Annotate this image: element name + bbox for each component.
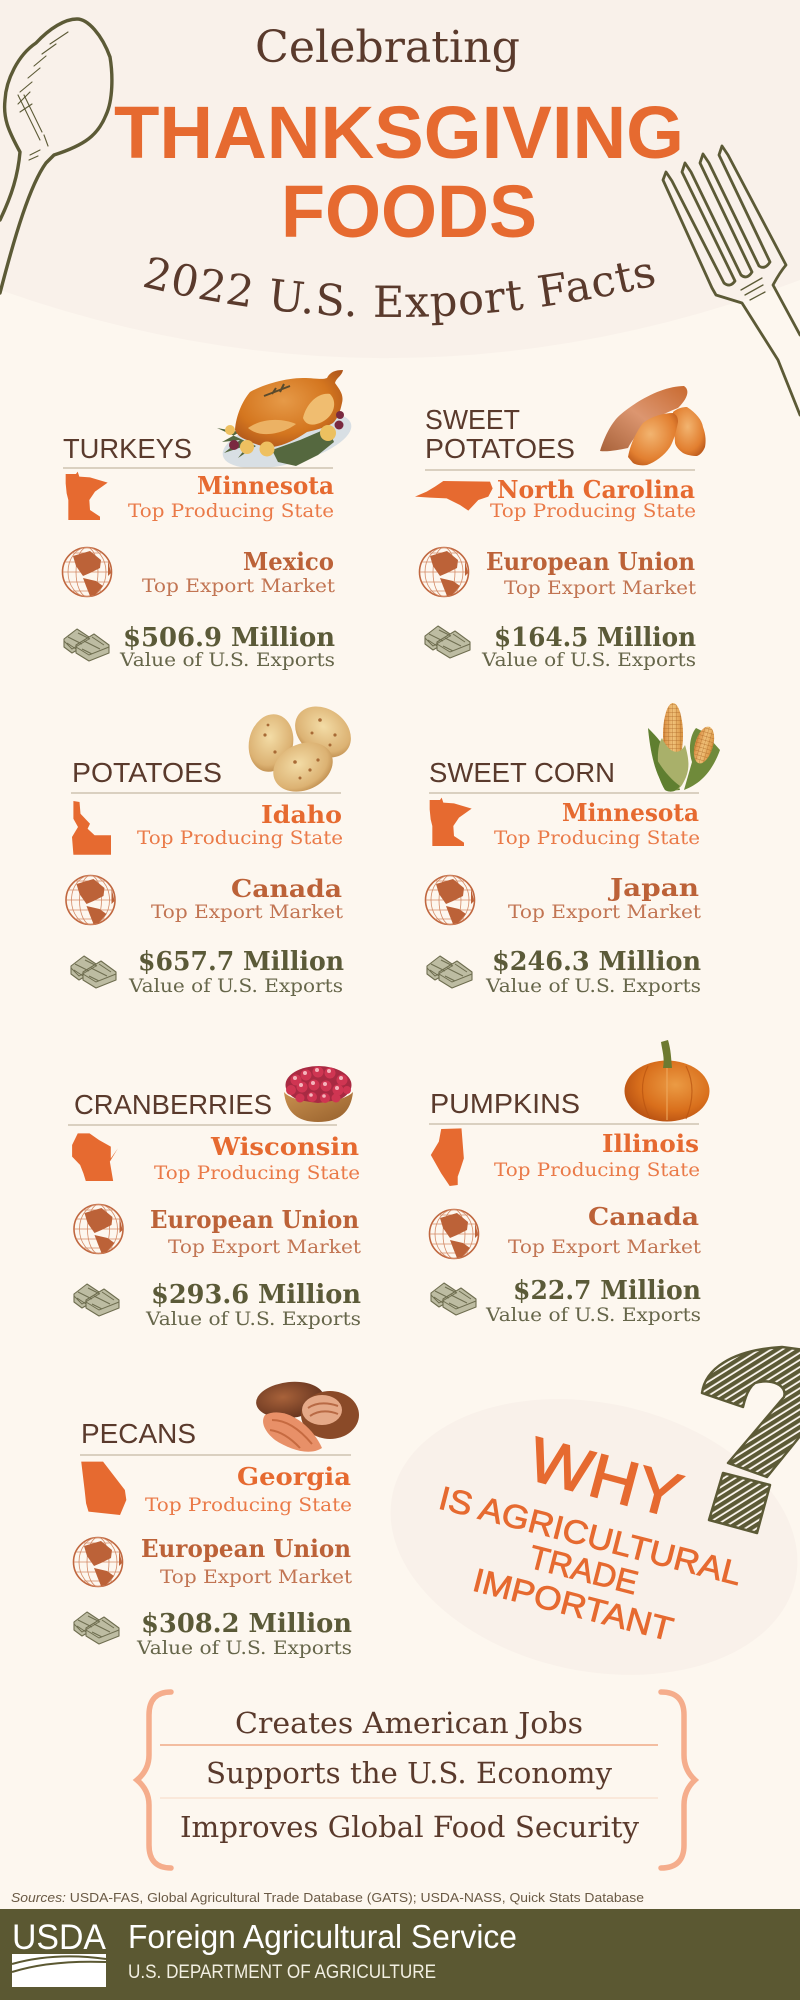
- top export market: Canada: [231, 874, 342, 903]
- heading: PUMPKINS: [430, 1088, 580, 1119]
- icon: money: [74, 1284, 119, 1316]
- icon: money: [431, 1283, 476, 1315]
- top producing state: Minnesota: [562, 798, 699, 827]
- logo: usda: [12, 1918, 107, 1987]
- icon: question mark: [702, 1347, 800, 1533]
- icon: globe: [426, 876, 474, 924]
- top export market: Top Export Market: [508, 1236, 701, 1258]
- value of exports: $246.3 Million: [492, 947, 701, 977]
- icon: illinois: [431, 1128, 464, 1186]
- value of exports: Value of U.S. Exports: [119, 649, 335, 671]
- icon: minnesota: [430, 798, 472, 846]
- top export market: Canada: [588, 1202, 699, 1231]
- icon: spoon: [0, 19, 112, 293]
- value of exports: Value of U.S. Exports: [485, 975, 701, 997]
- top export market: [486, 547, 696, 599]
- illustration: sweet potatoes: [600, 386, 706, 465]
- icon: north carolina: [415, 481, 493, 511]
- panel: sweet corn: [426, 703, 720, 997]
- top export market: [508, 873, 701, 923]
- department name: U.S. DEPARTMENT OF AGRICULTURE: [128, 1962, 436, 1983]
- icon: globe: [62, 548, 112, 596]
- icon: globe: [74, 1538, 122, 1586]
- value of exports: [481, 623, 696, 671]
- value of exports: [485, 947, 701, 997]
- callout: why is agricultural trade important: [365, 1347, 800, 1711]
- subtitle on arc: [141, 282, 668, 317]
- heading: SWEET: [425, 404, 520, 435]
- heading: foods: FOODS: [281, 170, 537, 253]
- top export market: Mexico: [243, 547, 334, 576]
- value of exports: Value of U.S. Exports: [145, 1308, 361, 1330]
- icon: fork: [663, 146, 800, 415]
- top export market: European Union: [150, 1205, 359, 1234]
- top export market: Top Export Market: [160, 1566, 352, 1588]
- value of exports: [128, 947, 344, 997]
- text: important: IMPORTANT: [469, 1561, 677, 1648]
- footer: [0, 1909, 800, 2000]
- value of exports: $164.5 Million: [494, 623, 696, 653]
- icon: money: [64, 629, 109, 661]
- heading: TURKEYS: [63, 433, 192, 464]
- top producing state: Minnesota: [197, 471, 334, 500]
- value of exports: $22.7 Million: [513, 1276, 701, 1306]
- illustration: roast turkey: [217, 370, 357, 479]
- illustration: pumpkin: [624, 1040, 710, 1122]
- value of exports: Value of U.S. Exports: [485, 1304, 701, 1326]
- illustration: corn: [648, 703, 720, 792]
- illustration: cranberry bowl: [284, 1066, 353, 1122]
- value of exports: $293.6 Million: [151, 1280, 361, 1310]
- panel: turkeys: [62, 370, 357, 671]
- icon: georgia: [81, 1462, 126, 1515]
- top export market: [151, 874, 343, 923]
- top producing state: [494, 798, 700, 849]
- text: trade: TRADE: [525, 1538, 642, 1601]
- icon: minnesota: [66, 472, 108, 520]
- value of exports: [136, 1609, 352, 1659]
- top producing state: [145, 1462, 352, 1516]
- title: [114, 22, 684, 326]
- value of exports: Value of U.S. Exports: [136, 1637, 352, 1659]
- value of exports: [119, 623, 335, 671]
- benefit: food security: Improves Global Food Security: [180, 1810, 640, 1844]
- icon: money: [425, 626, 470, 658]
- top producing state: Top Producing State: [128, 500, 334, 522]
- panel: potatoes: [66, 696, 361, 997]
- heading: PECANS: [81, 1418, 196, 1449]
- panel: benefits list: [137, 1692, 695, 1868]
- top export market: Top Export Market: [508, 901, 701, 923]
- title: 2022 U.S. Export Facts: [144, 257, 654, 326]
- heading: POTATOES: [425, 433, 575, 464]
- top producing state: [490, 475, 696, 522]
- icon: globe: [74, 1204, 123, 1254]
- top export market: [141, 1534, 352, 1588]
- icon: globe: [430, 1210, 478, 1258]
- benefit: economy: Supports the U.S. Economy: [206, 1756, 613, 1790]
- logo: usda: USDA: [12, 1918, 107, 1957]
- icon: wisconsin: [72, 1133, 118, 1181]
- icon: money: [74, 1612, 119, 1644]
- value of exports: $657.7 Million: [138, 947, 344, 977]
- panel: pecans: [74, 1379, 359, 1659]
- top producing state: North Carolina: [497, 475, 695, 504]
- organization name: Foreign Agricultural Service: [128, 1918, 517, 1955]
- heading: SWEET CORN: [429, 757, 615, 788]
- top export market: [150, 1205, 361, 1258]
- value of exports: Value of U.S. Exports: [128, 975, 343, 997]
- value of exports: [485, 1276, 701, 1326]
- top producing state: Top Producing State: [494, 1159, 700, 1181]
- value of exports: Value of U.S. Exports: [481, 649, 696, 671]
- top export market: European Union: [141, 1534, 351, 1563]
- top producing state: Wisconsin: [210, 1132, 359, 1161]
- top producing state: Top Producing State: [494, 827, 700, 849]
- value of exports: $308.2 Million: [141, 1609, 352, 1639]
- value of exports: [145, 1280, 361, 1330]
- sources: Sources: USDA-FAS, Global Agricultural Trade Database (GATS); USDA-NASS, Quick Stats Database: [11, 1890, 644, 1905]
- heading: CRANBERRIES: [74, 1089, 272, 1120]
- heading: POTATOES: [72, 757, 222, 788]
- top producing state: Top Producing State: [137, 827, 343, 849]
- illustration: potatoes: [243, 696, 361, 801]
- top producing state: Top Producing State: [490, 500, 696, 522]
- heading: celebrating: Celebrating: [255, 22, 520, 73]
- panel: cranberries: [68, 1066, 361, 1330]
- top producing state: [494, 1129, 700, 1181]
- heading: thanksgiving: THANKSGIVING: [114, 91, 684, 174]
- top producing state: Georgia: [237, 1462, 351, 1491]
- top export market: Top Export Market: [168, 1236, 361, 1258]
- text: why: WHY: [521, 1425, 689, 1532]
- value of exports: $506.9 Million: [123, 623, 335, 653]
- right brace: [661, 1692, 695, 1868]
- benefit: jobs: Creates American Jobs: [235, 1706, 583, 1740]
- panel: pumpkins: [429, 1040, 710, 1326]
- top producing state: Top Producing State: [145, 1494, 352, 1516]
- icon: globe: [66, 876, 115, 924]
- icon: globe: [420, 548, 468, 596]
- panel: sweet potatoes: [415, 386, 706, 671]
- icon: idaho: [72, 801, 111, 855]
- top export market: [508, 1202, 701, 1258]
- top export market: Japan: [608, 873, 699, 902]
- heading: [425, 404, 575, 464]
- top producing state: [137, 800, 343, 849]
- top export market: [142, 547, 335, 597]
- icon: money: [71, 956, 116, 988]
- icon: money: [427, 956, 472, 988]
- top producing state: Top Producing State: [154, 1162, 360, 1184]
- top export market: Top Export Market: [142, 575, 335, 597]
- top producing state: [128, 471, 334, 522]
- top export market: Top Export Market: [151, 901, 343, 923]
- text: is agricultural: IS AGRICULTURAL: [435, 1479, 746, 1592]
- top producing state: [154, 1132, 360, 1184]
- illustration: pecans: [254, 1379, 359, 1452]
- left brace: [137, 1692, 171, 1868]
- top export market: European Union: [486, 547, 695, 576]
- top producing state: Illinois: [602, 1129, 699, 1158]
- top export market: Top Export Market: [504, 577, 696, 599]
- top producing state: Idaho: [261, 800, 342, 829]
- header background arc: [0, 0, 800, 358]
- callout background blob: [365, 1363, 800, 1711]
